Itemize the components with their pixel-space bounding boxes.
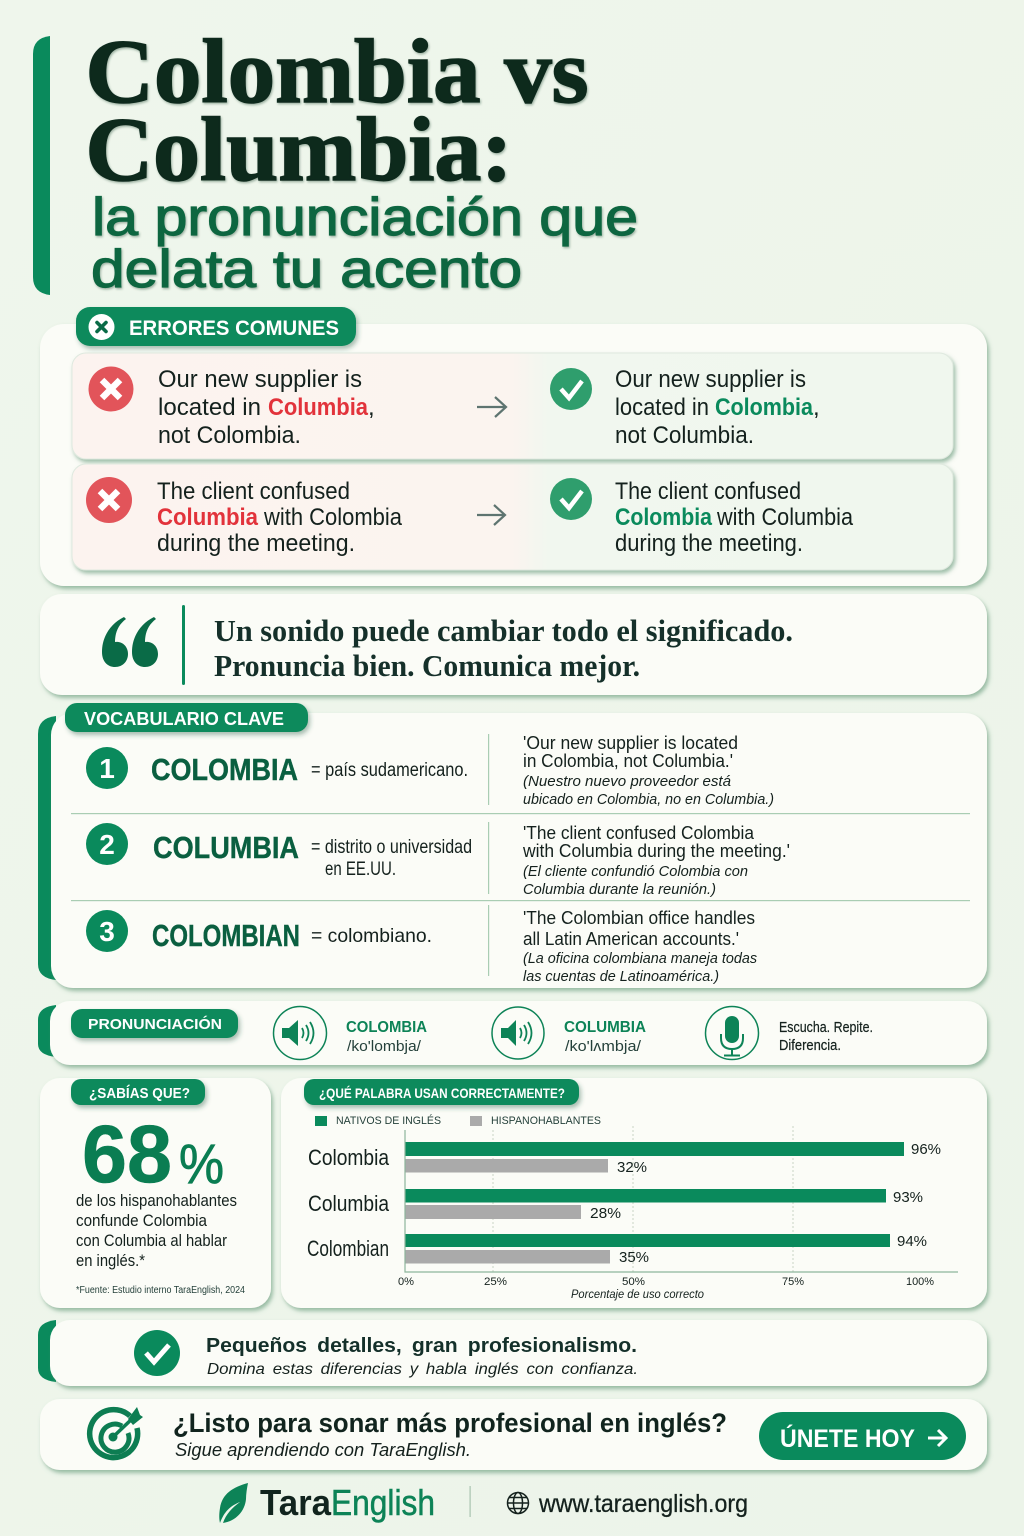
bars: colombian: Colombian bbox=[307, 1236, 389, 1261]
bars: colombia bbox=[308, 1141, 941, 1176]
wrong sentence: with Colombia bbox=[263, 504, 403, 531]
error row 1 bbox=[72, 353, 953, 459]
call to action text bbox=[173, 1408, 727, 1460]
example 3: (La oficina colombiana maneja todas bbox=[523, 951, 757, 967]
icon: target bbox=[90, 1407, 143, 1458]
arrow bbox=[477, 505, 505, 525]
correct sentence: located in bbox=[615, 394, 709, 421]
heading: ¿sabías que? bbox=[71, 1079, 205, 1105]
wrong sentence: The client confused bbox=[157, 478, 350, 505]
bars: colombian: 35% bbox=[619, 1249, 649, 1266]
heading: vocabulario clave bbox=[65, 703, 308, 732]
example 3: 'The Colombian office handles bbox=[523, 908, 755, 928]
correct sentence: , bbox=[813, 394, 820, 421]
axes: Porcentaje de uso correcto bbox=[571, 1289, 705, 1301]
pronunciation: columbia: /ko'lʌmbja/ bbox=[565, 1038, 642, 1055]
vocab item 2 bbox=[86, 823, 790, 898]
icon: wrong bbox=[88, 366, 134, 412]
example 1: in Colombia, not Columbia.' bbox=[523, 751, 733, 771]
footer bbox=[219, 1482, 748, 1523]
pronunciation: columbia bbox=[564, 1019, 646, 1055]
example 2: Columbia durante la reunión.) bbox=[523, 882, 716, 898]
wrong sentence: Columbia bbox=[157, 504, 259, 531]
vocab item 2: COLUMBIA bbox=[153, 830, 299, 865]
wrong sentence bbox=[157, 478, 403, 557]
axes bbox=[398, 1130, 958, 1301]
heading: pronunciación: PRONUNCIACIÓN bbox=[88, 1015, 222, 1033]
website: www.taraenglish.org bbox=[538, 1490, 748, 1518]
example 1 bbox=[523, 733, 774, 808]
panel: quote bbox=[40, 594, 987, 695]
panel: vocabulario clave bbox=[38, 703, 987, 988]
example 3 bbox=[523, 908, 757, 985]
pronunciation tip: Diferencia. bbox=[779, 1038, 841, 1054]
icon: correct bbox=[550, 368, 592, 410]
call to action text: ¿Listo para sonar más profesional en inglés? bbox=[173, 1408, 727, 1438]
vocab item 2: = distrito o universidad bbox=[311, 837, 472, 858]
correct sentence: Colombia bbox=[615, 504, 713, 531]
error row 2 bbox=[72, 464, 953, 570]
vocab item 1: = país sudamericano. bbox=[311, 760, 468, 781]
icon: speaker bbox=[274, 1006, 326, 1060]
legend: HISPANOHABLANTES bbox=[491, 1115, 601, 1127]
subtitle bbox=[91, 188, 638, 299]
example 1: (Nuestro nuevo proveedor está bbox=[523, 774, 731, 790]
icon: globe bbox=[508, 1492, 528, 1514]
correct sentence: Our new supplier is bbox=[615, 366, 806, 393]
arrow bbox=[477, 397, 506, 417]
example 1: ubicado en Colombia, no en Columbia.) bbox=[523, 792, 774, 808]
logo text: English bbox=[331, 1482, 435, 1523]
quote text: Pronuncia bien. Comunica mejor. bbox=[214, 648, 640, 683]
bars: colombia: 32% bbox=[617, 1159, 647, 1176]
pronunciation tip: Escucha. Repite. bbox=[779, 1020, 873, 1036]
takeaway text: Domina estas diferencias y habla inglés con confianza. bbox=[207, 1361, 638, 1378]
title: Columbia: bbox=[86, 99, 512, 200]
axes: 0% bbox=[398, 1276, 414, 1288]
bars: columbia: 28% bbox=[590, 1205, 621, 1222]
subtitle: delata tu acento bbox=[91, 240, 522, 299]
bars: columbia: Columbia bbox=[308, 1191, 390, 1216]
correct sentence: Colombia bbox=[715, 394, 814, 421]
call to action text: Sigue aprendiendo con TaraEnglish. bbox=[175, 1440, 471, 1460]
wrong sentence: during the meeting. bbox=[157, 530, 355, 557]
vocab item 1: COLOMBIA bbox=[151, 752, 298, 787]
statistic description: con Columbia al hablar bbox=[76, 1232, 227, 1250]
statistic description bbox=[76, 1192, 237, 1270]
heading: chart: ¿QUÉ PALABRA USAN CORRECTAMENTE? bbox=[319, 1085, 565, 1101]
heading: errores comunes bbox=[76, 307, 356, 346]
example 2: with Columbia during the meeting.' bbox=[522, 841, 790, 861]
icon: speaker bbox=[492, 1007, 544, 1059]
takeaway text: Pequeños detalles, gran profesionalismo. bbox=[206, 1335, 637, 1357]
legend: NATIVOS DE INGLÉS bbox=[336, 1114, 441, 1127]
axes: 100% bbox=[906, 1276, 934, 1288]
heading: vocabulario clave: VOCABULARIO CLAVE bbox=[84, 709, 284, 729]
correct sentence: The client confused bbox=[615, 478, 801, 505]
quote text: Un sonido puede cambiar todo el significado. bbox=[214, 613, 793, 648]
statistic description: confunde Colombia bbox=[76, 1212, 208, 1230]
wrong sentence: not Colombia. bbox=[158, 422, 301, 449]
example 2: (El cliente confundió Colombia con bbox=[523, 864, 748, 880]
pronunciation: colombia: /ko'lombja/ bbox=[347, 1038, 422, 1055]
divider bbox=[182, 605, 185, 685]
bars: colombia: 96% bbox=[911, 1141, 941, 1158]
statistic: 68%: 68 bbox=[82, 1109, 172, 1200]
example 1: 'Our new supplier is located bbox=[523, 733, 738, 753]
heading: errores comunes: ERRORES COMUNES bbox=[129, 317, 339, 340]
bars: columbia: 93% bbox=[893, 1189, 923, 1206]
statistic: 68%: % bbox=[179, 1132, 224, 1195]
icon: microphone bbox=[706, 1006, 758, 1060]
axes: 50% bbox=[622, 1276, 645, 1288]
correct sentence: not Columbia. bbox=[615, 422, 754, 449]
quote text bbox=[214, 613, 793, 683]
legend bbox=[315, 1114, 601, 1127]
correct sentence bbox=[615, 478, 854, 557]
wrong sentence: located in bbox=[158, 394, 261, 421]
logo text bbox=[260, 1482, 435, 1523]
source note: *Fuente: Estudio interno TaraEnglish, 2024 bbox=[76, 1285, 245, 1296]
example 2 bbox=[522, 823, 790, 898]
axes: 25% bbox=[484, 1276, 507, 1288]
vocab item 2: en EE.UU. bbox=[325, 859, 396, 880]
vocab item 3: COLOMBIAN bbox=[152, 918, 300, 953]
takeaway text bbox=[206, 1335, 638, 1378]
example 3: all Latin American accounts.' bbox=[523, 929, 739, 949]
example 3: las cuentas de Latinoamérica.) bbox=[523, 969, 719, 985]
title bbox=[86, 21, 588, 200]
wrong sentence: Our new supplier is bbox=[158, 366, 362, 393]
subtitle: la pronunciación que bbox=[92, 188, 638, 247]
icon: wrong bbox=[86, 477, 132, 523]
logo text: Tara bbox=[260, 1482, 332, 1523]
wrong sentence: , bbox=[368, 394, 375, 421]
bars: colombia: Colombia bbox=[308, 1145, 390, 1170]
icon: quotation mark bbox=[102, 617, 158, 667]
icon: leaf logo bbox=[219, 1483, 248, 1523]
icon: correct bbox=[550, 478, 592, 520]
heading: pronunciación bbox=[71, 1009, 238, 1038]
correct sentence: with Columbia bbox=[716, 504, 854, 531]
bars: columbia bbox=[308, 1189, 923, 1222]
vocab item 3: = colombiano. bbox=[311, 925, 432, 947]
panel: bar chart bbox=[281, 1078, 987, 1308]
vocab item 3 bbox=[86, 908, 757, 985]
panel: takeaway banner bbox=[38, 1320, 987, 1386]
correct sentence: during the meeting. bbox=[615, 530, 803, 557]
pronunciation: colombia: COLOMBIA bbox=[346, 1019, 427, 1036]
vocab item 2: 2 bbox=[99, 829, 115, 860]
correct sentence bbox=[615, 366, 820, 449]
pronunciation tip bbox=[779, 1020, 873, 1054]
pronunciation: colombia bbox=[346, 1019, 427, 1055]
heading: ¿sabías que?: ¿SABÍAS QUE? bbox=[89, 1085, 190, 1102]
vocab item 1: 1 bbox=[99, 753, 115, 784]
bars: colombian: 94% bbox=[897, 1233, 927, 1250]
pronunciation: columbia: COLUMBIA bbox=[564, 1019, 646, 1036]
button: únete hoy bbox=[759, 1412, 966, 1460]
wrong sentence: Columbia bbox=[268, 394, 369, 421]
wrong sentence bbox=[158, 366, 375, 449]
statistic: 68% bbox=[82, 1109, 224, 1200]
heading: chart bbox=[304, 1079, 579, 1105]
panel: pronunciación bbox=[38, 1001, 987, 1065]
axes: 75% bbox=[782, 1276, 804, 1288]
panel: errores comunes bbox=[40, 307, 987, 586]
title: Colombia vs bbox=[86, 21, 588, 122]
button: únete hoy: ÚNETE HOY bbox=[780, 1423, 915, 1453]
title accent bar bbox=[33, 36, 50, 295]
bars: colombian bbox=[307, 1233, 927, 1266]
vocab item 3: 3 bbox=[99, 916, 115, 947]
statistic description: de los hispanohablantes bbox=[76, 1192, 237, 1210]
panel: call to action bbox=[40, 1399, 987, 1470]
panel: ¿sabías que? bbox=[40, 1078, 271, 1308]
vocab item 1 bbox=[86, 733, 774, 808]
example 2: 'The client confused Colombia bbox=[523, 823, 755, 843]
icon: check bbox=[134, 1330, 180, 1376]
statistic description: en inglés.* bbox=[76, 1252, 146, 1270]
